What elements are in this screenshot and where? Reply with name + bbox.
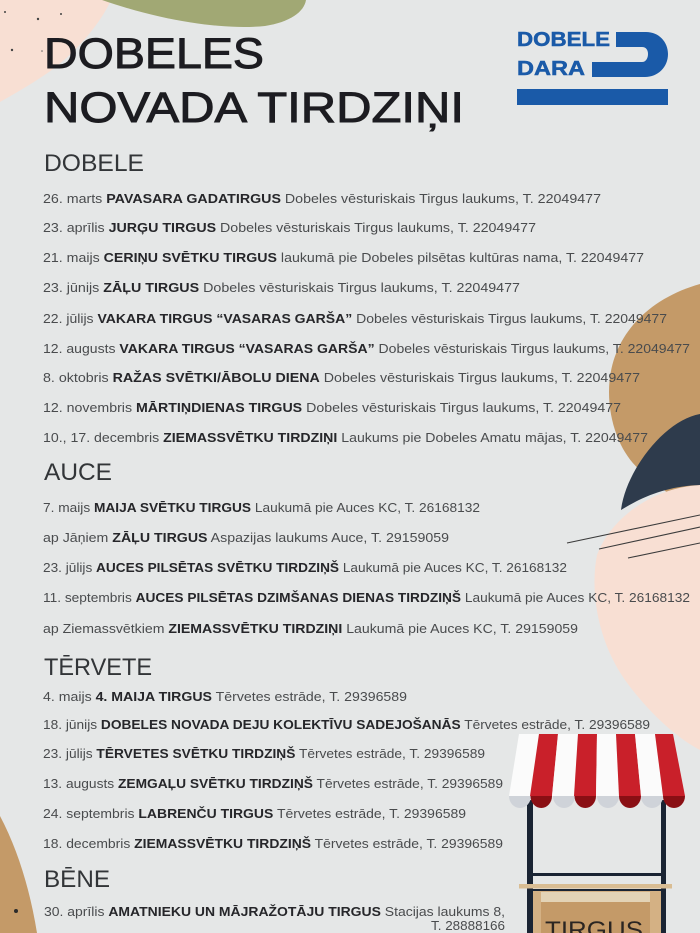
event line: 7. maijs MAIJA SVĒTKU TIRGUS Laukumā pie Auces KC, T. 26168132: [43, 501, 480, 515]
awning stripes: [509, 734, 685, 796]
event line: 13. augusts ZEMGAĻU SVĒTKU TIRDZIŅŠ Tērvetes estrāde, T. 29396589: [43, 776, 503, 791]
shape: tan blob bottom left: [0, 816, 37, 933]
event line: 12. novembris MĀRTIŅDIENAS TIRGUS Dobeles vēsturiskais Tirgus laukums, T. 22049477: [43, 401, 621, 415]
stall sign board: [533, 891, 661, 933]
event line: 22. jūlijs VAKARA TIRGUS “VASARAS GARŠA” Dobeles vēsturiskais Tirgus laukums, T. 22049477: [43, 311, 667, 326]
section: Tērvete: [43, 654, 650, 851]
heading: Dobele: DOBELE: [44, 150, 144, 177]
event line: 21. maijs CERIŅU SVĒTKU TIRGUS laukumā pie Dobeles pilsētas kultūras nama, T. 22049477: [43, 251, 644, 265]
section: Auce: [43, 459, 690, 636]
shape: peach circle right: [594, 485, 700, 750]
event line: 23. jūlijs TĒRVETES SVĒTKU TIRDZIŅŠ Tērvetes estrāde, T. 29396589: [43, 746, 485, 761]
heading: Tērvete: TĒRVETE: [44, 654, 152, 681]
event line: 23. aprīlis JURĢU TIRGUS Dobeles vēsturiskais Tirgus laukums, T. 22049477: [43, 221, 536, 235]
stall posts: [527, 800, 666, 933]
event line: 11. septembris AUCES PILSĒTAS DZIMŠANAS DIENAS TIRDZIŅŠ Laukumā pie Auces KC, T. 26168132: [43, 590, 690, 605]
event line: 8. oktobris RAŽAS SVĒTKI/ĀBOLU DIENA Dobeles vēsturiskais Tirgus laukums, T. 22049477: [43, 370, 640, 385]
heading: Bēne: BĒNE: [44, 866, 110, 893]
event line: ap Jāņiem ZĀĻU TIRGUS Aspazijas laukums Auce, T. 29159059: [43, 531, 449, 545]
event line: 23. jūlijs AUCES PILSĒTAS SVĒTKU TIRDZIŅŠ Laukumā pie Auces KC, T. 26168132: [43, 560, 567, 575]
icon: market stall: [509, 734, 685, 933]
event line: 23. jūnijs ZĀĻU TIRGUS Dobeles vēsturiskais Tirgus laukums, T. 22049477: [43, 281, 520, 295]
event line: 18. jūnijs DOBELES NOVADA DEJU KOLEKTĪVU SADEJOŠANĀS Tērvetes estrāde, T. 29396589: [43, 717, 650, 732]
awning scallops: [509, 796, 685, 808]
title: DOBELES: [44, 30, 264, 78]
event line: 18. decembris ZIEMASSVĒTKU TIRDZIŅŠ Tērvetes estrāde, T. 29396589: [43, 836, 503, 851]
title: [44, 30, 464, 132]
shape: accent lines: [567, 515, 700, 558]
event line: 10., 17. decembris ZIEMASSVĒTKU TIRDZIŅI Laukums pie Dobeles Amatu mājas, T. 22049477: [43, 431, 648, 445]
event line: 24. septembris LABRENČU TIRGUS Tērvetes estrāde, T. 29396589: [43, 806, 466, 821]
section: Dobele: [43, 150, 690, 445]
heading: Auce: AUCE: [44, 459, 112, 486]
event line: 26. marts PAVASARA GADATIRGUS Dobeles vēsturiskais Tirgus laukums, T. 22049477: [43, 192, 601, 206]
stall shelf: [519, 884, 672, 888]
title: NOVADA TIRDZIŅI: [44, 84, 464, 132]
shape: tan circle right: [609, 284, 700, 520]
shape: peach blob top left: [0, 0, 111, 102]
shape: olive blob top: [102, 0, 306, 27]
event line: 4. maijs 4. MAIJA TIRGUS Tērvetes estrāde, T. 29396589: [43, 690, 407, 704]
logo: Dobele dara: [517, 29, 668, 105]
logo: Dobele dara: DOBELE: [517, 29, 610, 51]
event line: ap Ziemassvētkiem ZIEMASSVĒTKU TIRDZIŅI Laukumā pie Auces KC, T. 29159059: [43, 622, 578, 636]
shape: navy blob right: [621, 414, 700, 510]
event line: 30. aprīlis AMATNIEKU UN MĀJRAŽOTĀJU TIRGUS Stacijas laukums 8,: [44, 904, 505, 919]
section: Bēne: [44, 866, 505, 933]
logo: Dobele dara: DARA: [517, 58, 585, 80]
event line: 12. augusts VAKARA TIRGUS “VASARAS GARŠA” Dobeles vēsturiskais Tirgus laukums, T. 22049477: [43, 341, 690, 356]
event line continuation: T. 28888166: [431, 919, 505, 933]
